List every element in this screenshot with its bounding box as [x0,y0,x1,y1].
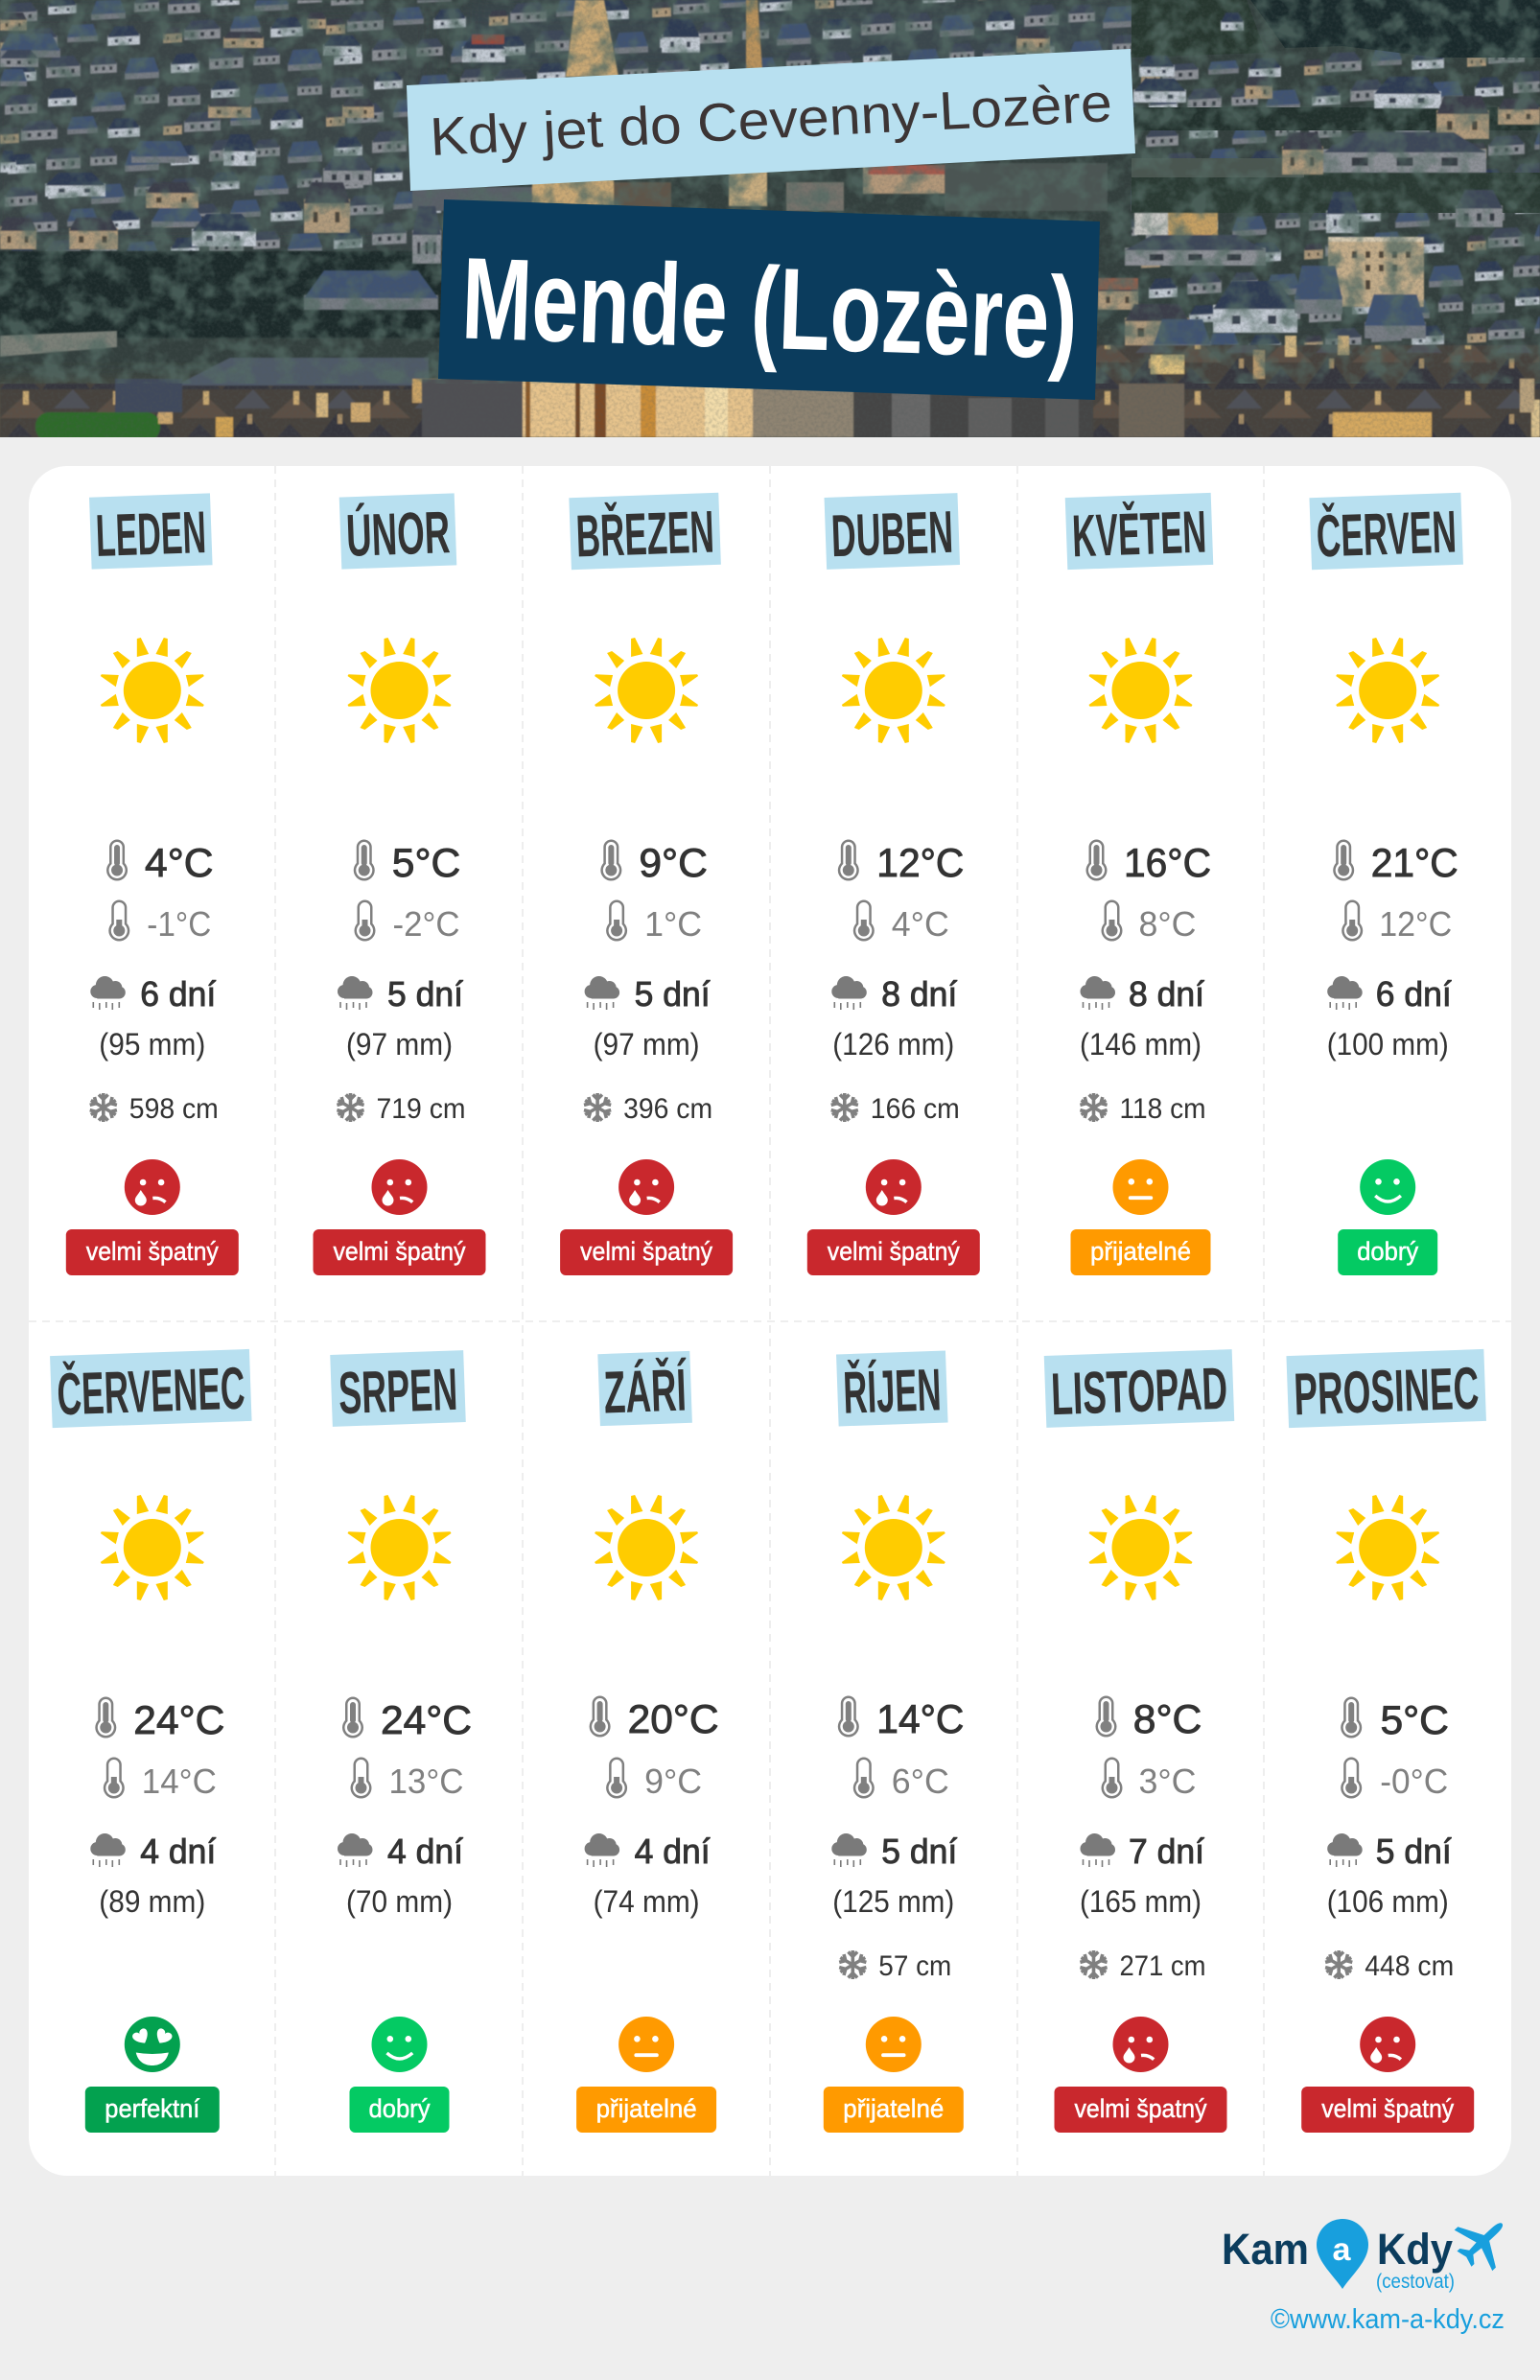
rainfall: (126 mm) [832,1027,954,1062]
low temperature: 4°C [892,904,949,944]
heading: LEDEN [95,500,207,570]
logo word: Kdy: Kdy [1377,2225,1453,2274]
snowfall [1324,1950,1454,1982]
icon: rating face [866,1159,922,1215]
rain days: 7 dní [1129,1832,1204,1871]
icon: sun [842,638,945,743]
heading: LISTOPAD [1050,1356,1228,1428]
icon: sun [101,638,204,743]
heading [1044,1349,1234,1428]
snowfall [1079,1093,1206,1125]
high temperature [106,840,214,885]
rating label: dobrý [368,2094,431,2123]
low temperature: 3°C [1139,1762,1197,1801]
heading: ŘÍJEN [842,1357,943,1427]
icon: rating face [125,1159,180,1215]
low temperature: -2°C [393,904,460,944]
rainfall: (70 mm) [346,1884,453,1919]
low temperature [606,899,702,944]
main title text: Mende (Lozère) [460,232,1080,384]
high temperature: 9°C [639,840,708,885]
logo tagline: (cestovat) [1376,2271,1455,2293]
month: ŘÍJEN [824,1351,964,2133]
high temperature [1095,1695,1202,1741]
icon: rating face [1360,2017,1415,2072]
snowfall: 598 cm [129,1093,219,1125]
icon: rating face [1360,1159,1415,1215]
high temperature [1085,840,1211,885]
website credit: ©www.kam-a-kdy.cz [1271,2304,1505,2335]
heading [1309,493,1463,571]
icon: rating face [618,1159,674,1215]
photo grain [0,0,1540,437]
low temperature: 6°C [892,1762,949,1801]
logo: Kam a Kdy [1222,2204,1521,2293]
icon: rating face [372,2017,428,2072]
rating label: velmi špatný [1321,2094,1455,2123]
rainfall: (95 mm) [99,1027,205,1062]
high temperature: 4°C [145,840,214,885]
month: ČERVENEC [50,1349,252,2133]
heading: ÚNOR [345,500,451,570]
rainfall: (89 mm) [99,1884,205,1919]
snowfall [583,1093,712,1125]
heading [89,493,213,570]
icon: map pin [1317,2219,1368,2289]
low temperature [351,1757,464,1801]
icon: rating face [125,2017,180,2072]
icon: sun [101,1495,204,1600]
high temperature [838,1695,964,1741]
high temperature: 5°C [1380,1697,1449,1742]
rain days [831,1832,957,1871]
month: DUBEN [807,493,980,1275]
panel: months card [29,466,1511,2176]
low temperature: 8°C [1139,904,1197,944]
rating label: přijatelné [1090,1237,1191,1266]
low temperature [1101,899,1197,944]
heading: ČERVENEC [56,1356,246,1428]
rain days: 8 dní [881,974,957,1014]
low temperature [1342,899,1452,944]
header photo: Mende townscape [0,0,1540,446]
rating label [1301,2087,1474,2133]
high temperature [838,840,964,885]
snowfall: 719 cm [376,1093,466,1125]
heading: KVĚTEN [1071,500,1207,570]
snowfall: 166 cm [871,1093,960,1125]
high temperature: 5°C [392,840,460,885]
heading [569,493,721,571]
low temperature: 13°C [389,1762,464,1801]
rain days [585,974,711,1014]
low temperature: 1°C [644,904,702,944]
low temperature [355,899,460,944]
rating label [807,1229,980,1275]
icon: rating face [1112,2017,1168,2072]
icon: sun [347,638,451,743]
low temperature [853,899,949,944]
rainfall: (97 mm) [594,1027,700,1062]
low temperature: -0°C [1380,1762,1448,1801]
rain days: 4 dní [140,1832,216,1871]
rain days [585,1832,711,1871]
rating label [1055,2087,1227,2133]
rain days [1080,1832,1204,1871]
rain days: 4 dní [387,1832,463,1871]
icon: sun [1089,1495,1193,1600]
dense hillside houses [0,0,1540,345]
snowfall [336,1093,466,1125]
low temperature [108,899,211,944]
heading: BŘEZEN [575,500,715,570]
rating label: velmi špatný [334,1237,466,1266]
low temperature: 14°C [142,1762,217,1801]
high temperature [600,840,708,885]
rating label: přijatelné [596,2094,697,2123]
icon: rating face [618,2017,674,2072]
snowfall: 271 cm [1120,1950,1206,1982]
rating label [1070,1229,1210,1275]
snowfall: 118 cm [1120,1093,1206,1125]
heading [597,1351,692,1427]
high temperature: 12°C [876,840,964,885]
month: LEDEN [66,493,239,1275]
month: SRPEN [330,1350,472,2133]
banner: subtitle [407,49,1135,191]
tree bands [0,0,1540,338]
rain days [338,974,463,1014]
rainfall: (125 mm) [832,1884,954,1919]
rain days: 5 dní [635,974,711,1014]
rain days: 8 dní [1129,974,1204,1014]
rating label: dobrý [1357,1237,1419,1266]
rain days: 6 dní [140,974,216,1014]
banner: main title [438,199,1100,400]
heading [825,493,960,570]
high temperature [590,1695,719,1741]
icon: sun [595,638,698,743]
heading: DUBEN [830,500,954,570]
low temperature [104,1757,217,1801]
rating label [824,2087,964,2133]
rating label [576,2087,716,2133]
high temperature [354,840,460,885]
high temperature: 21°C [1371,840,1458,885]
icon: sun [595,1495,698,1600]
rain days [338,1832,463,1871]
rating label: perfektní [105,2094,200,2123]
icon: rating face [372,1159,428,1215]
rating label: velmi špatný [86,1237,219,1266]
rain days [831,974,957,1014]
rain days: 6 dní [1376,974,1452,1014]
rating label: velmi špatný [828,1237,960,1266]
snowfall [829,1093,960,1125]
heading [330,1350,466,1427]
snowfall: 448 cm [1365,1950,1454,1982]
rainfall: (74 mm) [594,1884,700,1919]
rainfall: (165 mm) [1080,1884,1202,1919]
rain days [1327,1832,1452,1871]
month: KVĚTEN [1065,493,1213,1275]
month: PROSINEC [1286,1349,1486,2133]
rating label [349,2087,449,2133]
low temperature [1341,1757,1448,1801]
month: ZÁŘÍ [576,1351,719,2133]
rain days: 4 dní [635,1832,711,1871]
rain days [1327,974,1452,1014]
cathedral base below title [422,379,1112,437]
houses, upper centre and spires [412,0,1108,264]
high temperature: 24°C [381,1697,472,1742]
rating label [66,1229,239,1275]
snowfall [1079,1950,1206,1982]
heading [50,1349,252,1429]
snowfall [838,1950,951,1982]
rain days [90,1832,216,1871]
rainfall: (146 mm) [1080,1027,1202,1062]
heading [1065,493,1213,571]
rating label [85,2087,220,2133]
high temperature: 24°C [133,1697,224,1742]
icon: sun [347,1495,451,1600]
houses, left slope [0,12,441,437]
rainfall: (97 mm) [346,1027,453,1062]
snowfall [88,1093,219,1125]
low temperature [853,1757,949,1801]
rain days: 5 dní [387,974,463,1014]
rain days: 5 dní [881,1832,957,1871]
rating label [313,1229,485,1275]
heading [836,1351,948,1427]
high temperature [95,1697,224,1742]
snowfall: 57 cm [878,1950,951,1982]
rating label [560,1229,733,1275]
icon: map pin: a [1333,2231,1351,2267]
icon: sun [1336,1495,1439,1600]
rain days [1080,974,1204,1014]
high temperature [342,1697,472,1742]
month: ÚNOR [313,493,485,1275]
high temperature: 14°C [876,1696,964,1741]
high temperature [1341,1697,1449,1742]
rating label: velmi špatný [1074,2094,1207,2123]
low temperature: 9°C [644,1762,702,1801]
icon: sun [1089,638,1193,743]
low temperature [1101,1757,1197,1801]
low temperature: -1°C [147,904,211,944]
rain days: 5 dní [1376,1832,1452,1871]
low temperature: 12°C [1379,904,1452,944]
high temperature: 8°C [1133,1696,1202,1741]
rating label [1338,1229,1437,1275]
low temperature [606,1757,702,1801]
icon: sun [1336,638,1439,743]
icon: rating face [866,2017,922,2072]
heading: SRPEN [338,1357,458,1427]
month: LISTOPAD [1044,1349,1234,2133]
logo word: Kam: Kam [1222,2225,1309,2274]
houses, right slope [1093,12,1540,437]
icon: plane [1445,2204,1521,2279]
rain days [90,974,216,1014]
month: ČERVEN [1309,493,1463,1275]
icon: rating face [1112,1159,1168,1215]
icon: sun [842,1495,945,1600]
rainfall: (106 mm) [1327,1884,1449,1919]
subtitle text: Kdy jet do Cevenny-Lozère [429,72,1113,167]
high temperature: 20°C [628,1696,719,1741]
heading [339,493,456,570]
rating label: přijatelné [843,2094,944,2123]
heading: ZÁŘÍ [603,1357,688,1426]
tree mottling [0,0,1540,384]
rating label: velmi špatný [580,1237,713,1266]
rainfall: (100 mm) [1327,1027,1449,1062]
month: BŘEZEN [560,493,733,1275]
snowfall: 396 cm [623,1093,712,1125]
high temperature [1333,840,1458,885]
high temperature: 16°C [1124,840,1211,885]
